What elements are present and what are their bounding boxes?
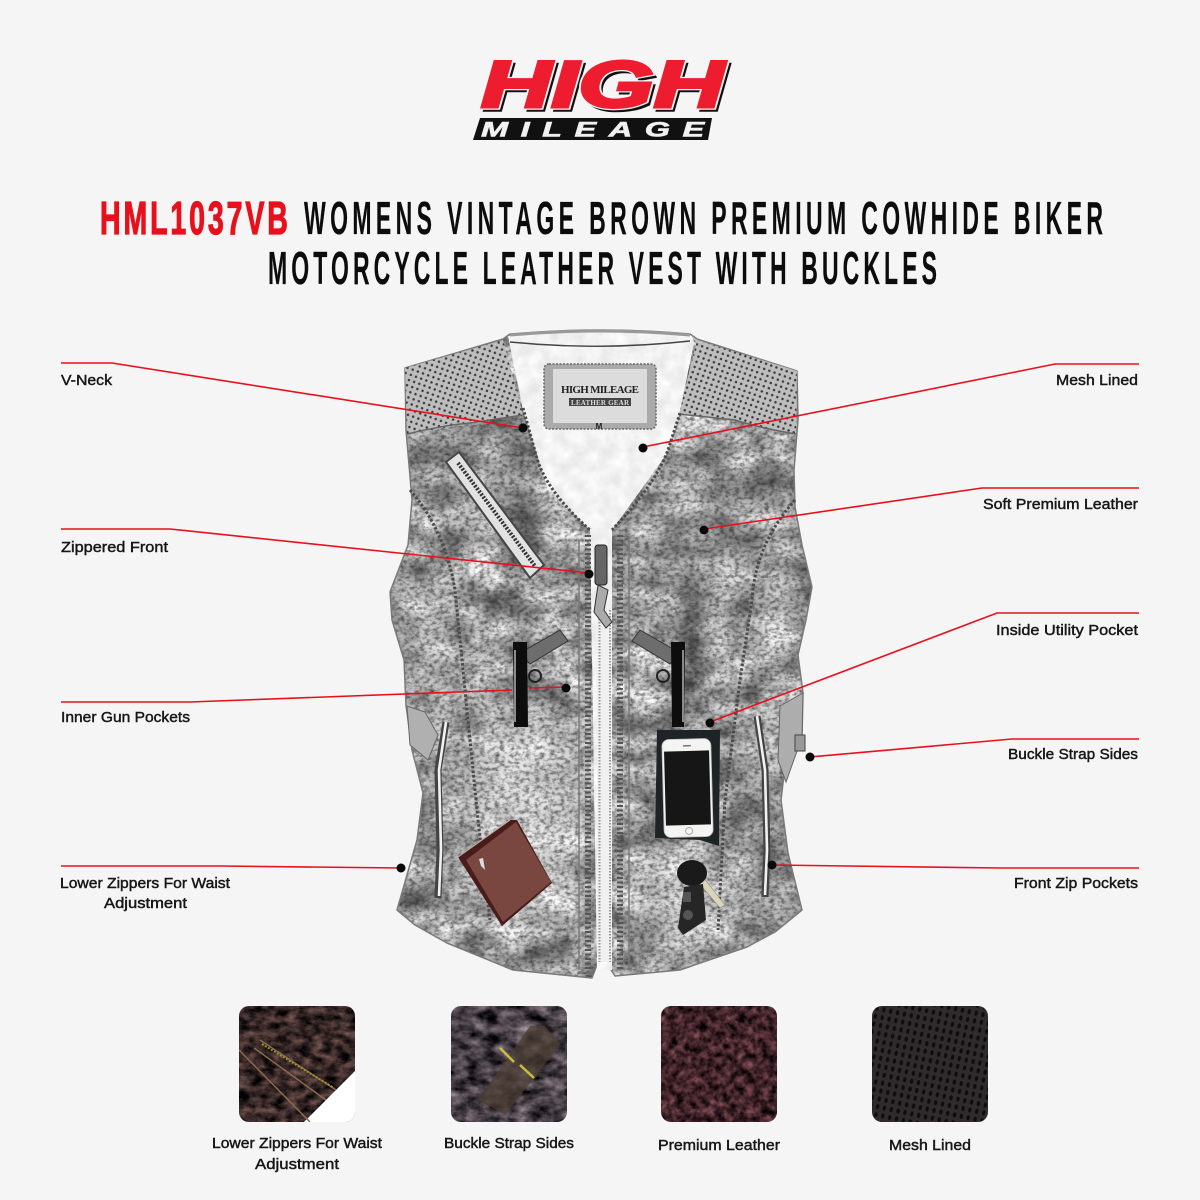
title xyxy=(100,192,1103,294)
logo: High Mileage: HIGH xyxy=(484,50,729,124)
callout: Front Zip Pockets xyxy=(768,860,1139,892)
callout: Lower Zippers For Waist Adjustment xyxy=(60,864,406,912)
brand neck label: LEATHER GEAR xyxy=(571,399,630,407)
thumbnail: mesh xyxy=(872,1006,988,1122)
central front zipper xyxy=(579,535,629,970)
caption: premium leather: Premium Leather xyxy=(658,1137,780,1154)
logo: High Mileage: MILEAGE xyxy=(481,117,705,141)
callout: V-Neck: V-Neck xyxy=(61,372,113,389)
icon: car keys xyxy=(677,860,725,935)
caption: mesh lined: Mesh Lined xyxy=(889,1137,971,1154)
callout: Soft Premium Leather: Soft Premium Leather xyxy=(983,496,1138,513)
callout: Inside Utility Pocket: Inside Utility Pocket xyxy=(996,622,1139,639)
callout: Lower Zippers For Waist Adjustment: Lower Zippers For Waist xyxy=(60,875,231,892)
caption: lower zippers: Adjustment xyxy=(255,1156,340,1173)
brand neck label xyxy=(544,364,656,431)
callout: Zippered Front xyxy=(61,529,594,578)
side buckle straps xyxy=(407,693,805,782)
caption: lower zippers: Lower Zippers For Waist xyxy=(212,1135,383,1152)
callout: V-Neck xyxy=(61,363,528,432)
callout: Buckle Strap Sides: Buckle Strap Sides xyxy=(1008,746,1138,763)
gun in right inner pocket xyxy=(632,630,685,727)
callout: Zippered Front: Zippered Front xyxy=(61,539,169,556)
thumbnail: buckle straps xyxy=(451,1006,567,1122)
title: MOTORCYCLE LEATHER VEST WITH BUCKLES xyxy=(268,242,937,294)
callout: Inside Utility Pocket xyxy=(706,613,1139,728)
vest illustration xyxy=(380,320,820,990)
title: WOMENS VINTAGE BROWN PREMIUM COWHIDE BIKER xyxy=(304,192,1103,244)
callout: Buckle Strap Sides xyxy=(806,739,1139,763)
thumbnail: premium leather xyxy=(661,1006,777,1122)
vest leather body xyxy=(380,320,820,990)
caption: buckle strap sides: Buckle Strap Sides xyxy=(444,1135,574,1152)
title: HML1037VB xyxy=(100,193,288,245)
callout: Mesh Lined xyxy=(638,364,1139,452)
thumbnail: lower zippers xyxy=(239,1006,355,1122)
brand neck label: M xyxy=(596,422,603,431)
callout: Front Zip Pockets: Front Zip Pockets xyxy=(1014,875,1138,892)
icon: brown wallet xyxy=(458,820,552,926)
white inner liner xyxy=(500,326,700,976)
diagonal chest zipper pocket xyxy=(446,452,544,578)
callout: Soft Premium Leather xyxy=(700,488,1139,534)
callout: Lower Zippers For Waist Adjustment: Adjustment xyxy=(104,895,188,912)
logo: High Mileage xyxy=(473,47,729,141)
waist zipper left xyxy=(438,722,446,898)
icon: phone in utility pocket xyxy=(655,730,720,846)
brand neck label: HIGH MILEAGE xyxy=(561,384,639,396)
waist zipper right xyxy=(757,716,767,897)
vest outline xyxy=(390,330,812,978)
callout: Inner Gun Pockets xyxy=(61,684,570,726)
gun in left inner pocket xyxy=(513,630,568,727)
callout: Mesh Lined: Mesh Lined xyxy=(1056,372,1138,389)
logo: High Mileage: HIGH xyxy=(481,47,726,121)
callout: Inner Gun Pockets: Inner Gun Pockets xyxy=(61,709,190,726)
caption: lower zippers xyxy=(212,1135,383,1173)
perforated mesh shoulders xyxy=(405,340,797,434)
logo: High Mileage: HIGH xyxy=(481,47,726,121)
neckline and panel seams xyxy=(410,408,795,930)
